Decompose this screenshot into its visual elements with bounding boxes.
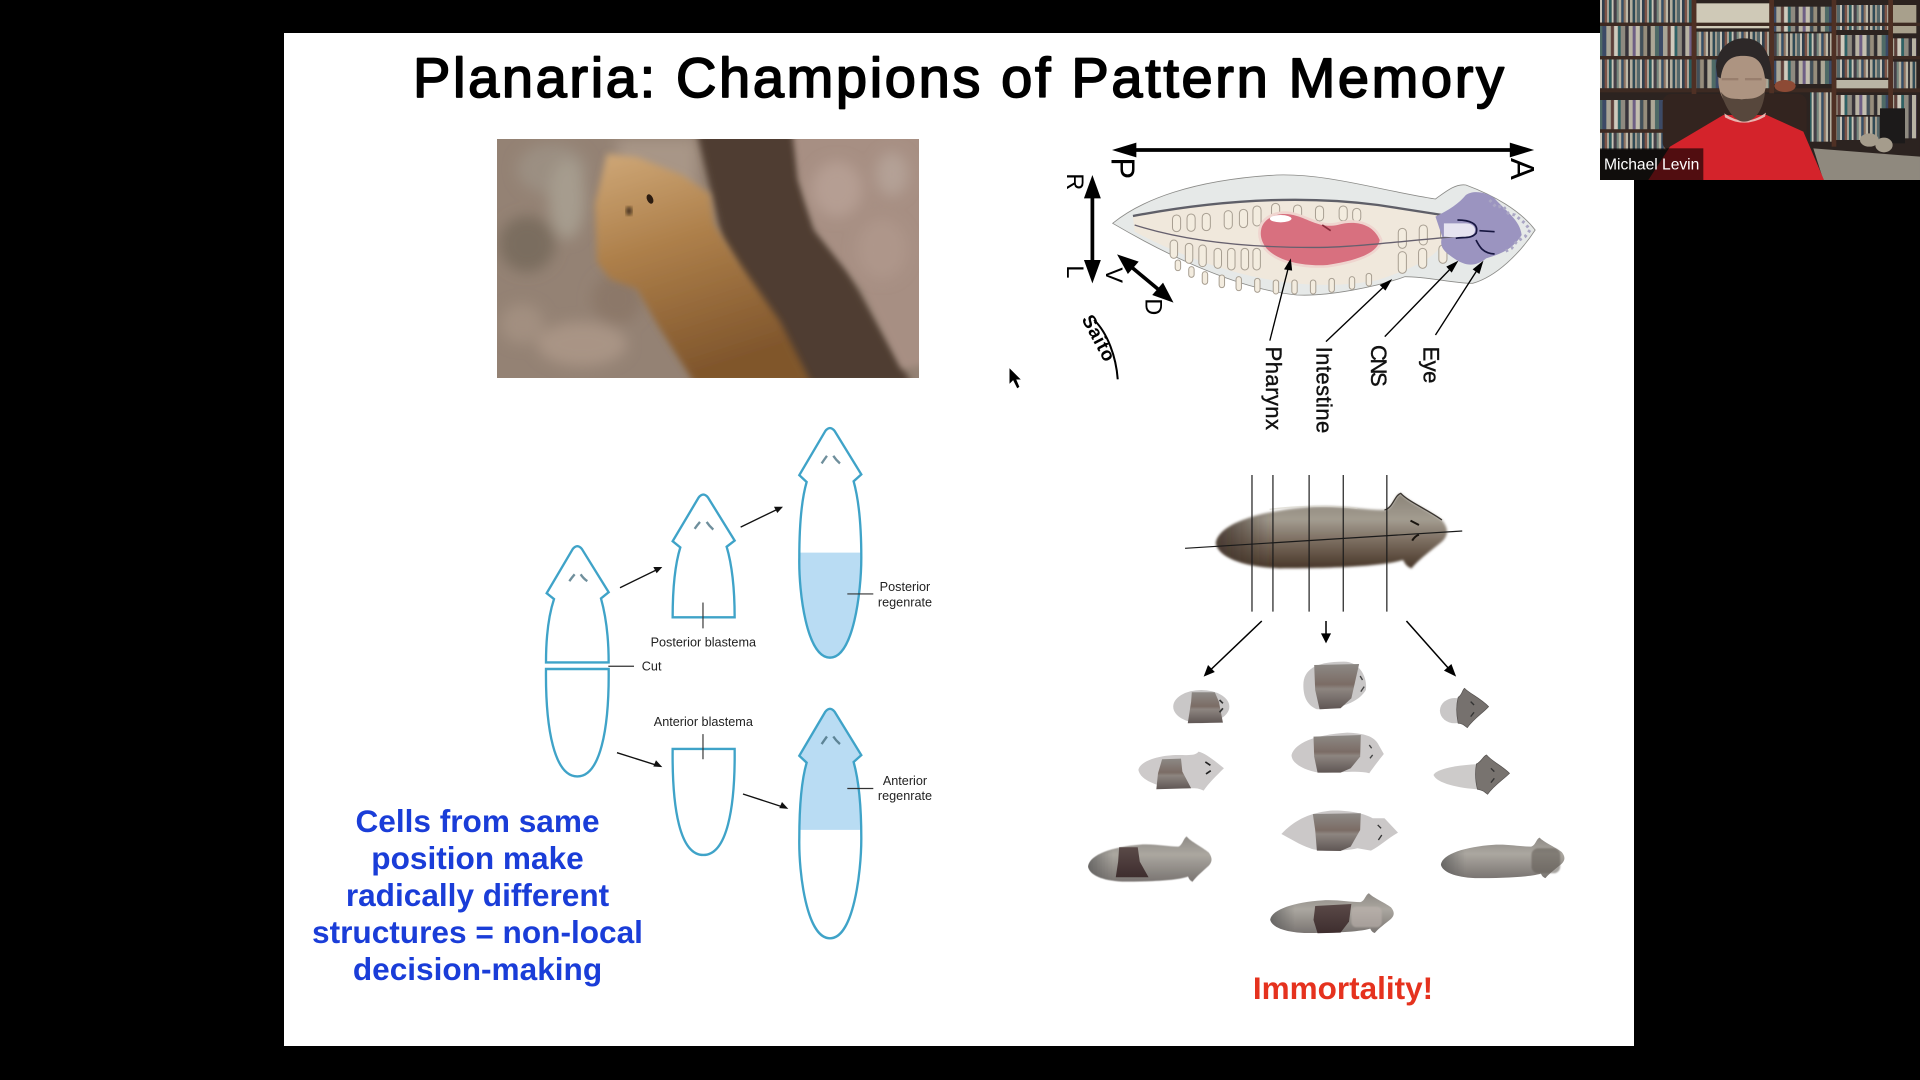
fragment: center 3 bbox=[1281, 811, 1398, 851]
webcam inset bbox=[1600, 0, 1920, 180]
axis letters: D bbox=[1140, 298, 1167, 315]
intestinal branches bbox=[1170, 203, 1449, 294]
name tag bbox=[1600, 148, 1703, 180]
annotation leader lines bbox=[608, 594, 873, 789]
fragment: center 2 bbox=[1292, 733, 1384, 773]
blue caption: Cells from same bbox=[355, 803, 600, 839]
floor bbox=[1813, 148, 1920, 180]
intact worm with cut lines bbox=[1185, 475, 1462, 612]
annotation labels: regenrate bbox=[878, 594, 932, 610]
fragmentation experiment bbox=[1088, 475, 1564, 933]
worm: anterior blastema bbox=[673, 749, 735, 855]
title: Planaria: Champions of Pattern Memory bbox=[413, 46, 1504, 109]
regeneration schematic bbox=[546, 428, 932, 938]
worm: anterior regenerate bbox=[799, 709, 861, 938]
photo: live planarian bbox=[497, 129, 927, 384]
axis letters: A bbox=[1504, 158, 1541, 180]
anatomical diagram of planarian: CNS bbox=[1366, 345, 1391, 387]
blue caption: position make bbox=[371, 840, 584, 876]
slide background bbox=[284, 33, 1634, 1046]
annotation labels: Posterior bbox=[880, 579, 931, 594]
fragment: center 4 full bbox=[1270, 893, 1394, 933]
anatomical diagram of planarian: Eye bbox=[1419, 347, 1444, 383]
axis arrows bbox=[1084, 143, 1534, 303]
pharynx bbox=[1261, 214, 1380, 265]
drums bbox=[1860, 108, 1905, 152]
anatomical diagram of planarian: Pharynx bbox=[1261, 347, 1286, 430]
fragment: right column full bbox=[1441, 838, 1564, 878]
red label: Immortality: Immortality! bbox=[1253, 970, 1433, 1006]
annotation labels: Posterior blastema bbox=[651, 634, 757, 650]
fragment: left column medium bbox=[1138, 752, 1224, 791]
signature: Saito: Saito bbox=[1078, 311, 1120, 366]
mouse cursor bbox=[1009, 367, 1022, 389]
axis letters: P bbox=[1105, 157, 1142, 179]
annotation labels: Anterior bbox=[883, 773, 928, 788]
anatomical diagram of planarian bbox=[1062, 143, 1541, 433]
annotation labels: Anterior blastema bbox=[654, 714, 754, 729]
fragment: right column small bbox=[1440, 688, 1489, 728]
worm: cut into two pieces bbox=[546, 546, 609, 776]
body outline bbox=[1113, 175, 1535, 295]
blue caption: radically different bbox=[346, 877, 610, 913]
fragment: right column medium bbox=[1433, 755, 1510, 794]
anatomical diagram of planarian: Intestine bbox=[1311, 347, 1337, 433]
arrows between stages bbox=[617, 507, 788, 809]
purple CNS and head bbox=[1435, 192, 1522, 265]
blue caption: decision-making bbox=[353, 951, 602, 987]
annotation labels bbox=[642, 579, 932, 803]
fragment: center 1 bbox=[1303, 662, 1366, 709]
worm: posterior blastema bbox=[673, 495, 735, 617]
eye cups and nerves bbox=[1444, 223, 1475, 237]
blue caption bbox=[312, 803, 643, 987]
axis letters: R bbox=[1062, 173, 1088, 190]
axis letters bbox=[1062, 157, 1541, 315]
axis letters: L bbox=[1062, 265, 1088, 278]
worm: posterior regenerate bbox=[799, 428, 861, 658]
inner gut field bbox=[1133, 200, 1442, 285]
pointer lines and labels bbox=[1270, 263, 1480, 342]
fragment: left column full bbox=[1088, 837, 1212, 882]
three down arrows bbox=[1204, 621, 1456, 677]
chair bbox=[1662, 94, 1696, 150]
neck and face bbox=[1716, 38, 1772, 123]
name tag: Michael Levin bbox=[1604, 156, 1699, 173]
blue caption: structures = non-local bbox=[312, 914, 643, 950]
fragment: left column small bbox=[1173, 690, 1229, 723]
axis letters: V bbox=[1101, 267, 1127, 283]
annotation labels: regenrate bbox=[878, 788, 932, 803]
annotation labels: Cut bbox=[642, 659, 662, 674]
red shirt bbox=[1648, 115, 1824, 180]
bookshelves bbox=[1600, 0, 1920, 149]
